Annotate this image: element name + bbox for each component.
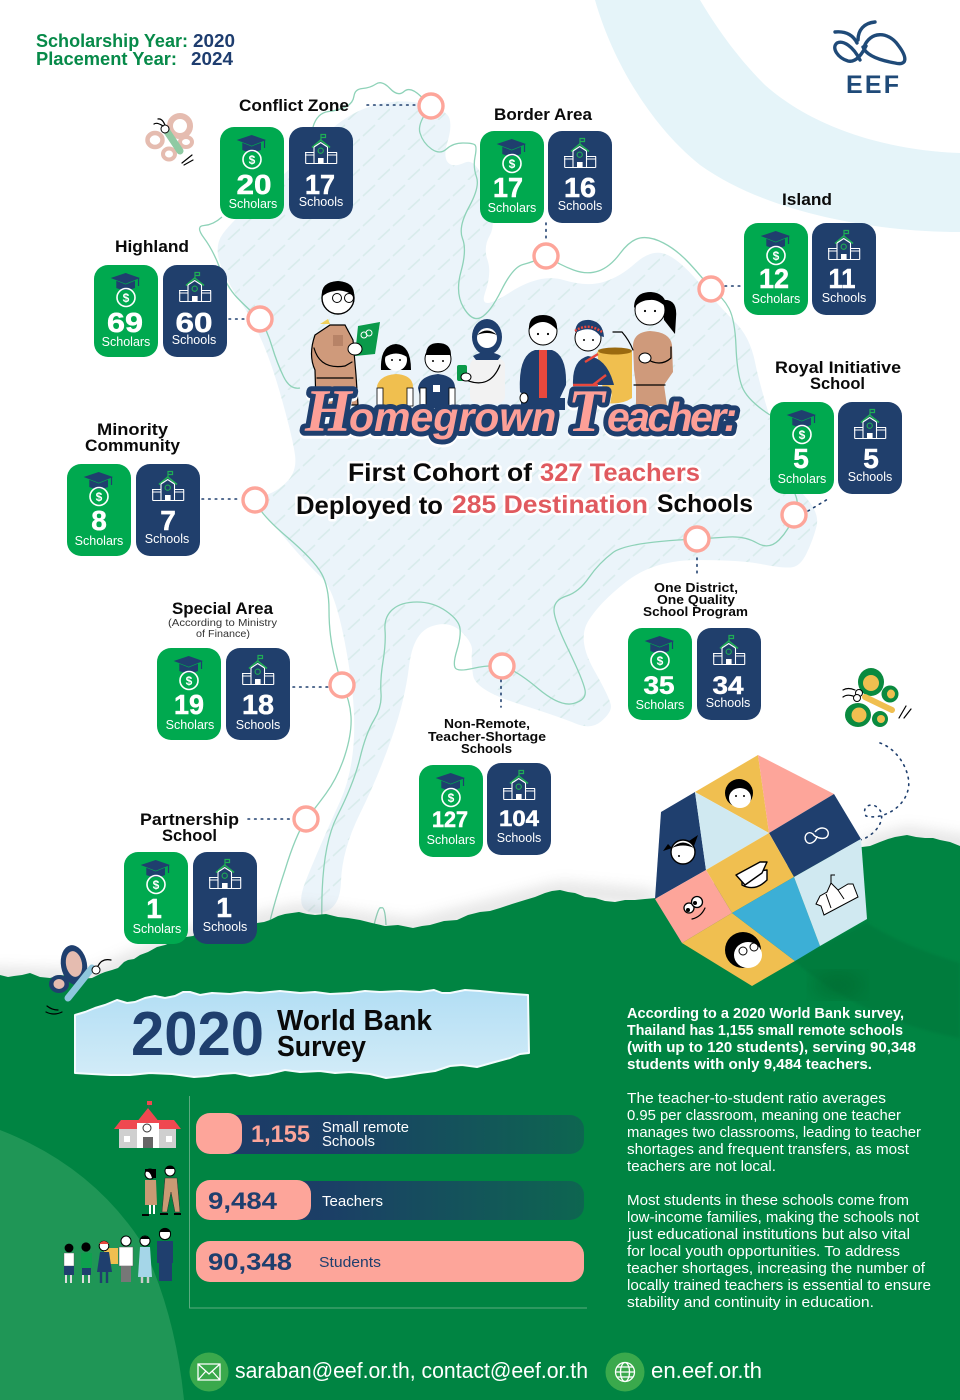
panel: non-remote teacher-shortage [419,716,551,857]
contact: email [190,1352,588,1392]
text block: teacher ratio: shortages and frequent transfers, as most [627,1142,909,1158]
scholars card: 69 [107,307,143,338]
icon: googly eyes [684,896,705,919]
schools card: 34 [712,672,744,700]
scholarship and placement years [36,31,235,69]
hexagon origami puzzle [655,755,867,986]
scholars card: Scholars [752,292,800,306]
decorative sky arc [595,0,960,232]
stat bar: teachers: Teachers [322,1193,383,1210]
schools card [697,628,761,720]
schools card [838,402,902,494]
banner heading: World Bank [277,1005,433,1037]
hill-tribe girl with basket figure [573,320,632,403]
schools card [136,464,200,556]
scholars card: Scholars [427,833,475,847]
scholars card [770,402,834,494]
text block: survey summary [627,1006,916,1073]
heading: Conflict Zone [239,96,349,115]
stat bar: students: Students [319,1254,381,1271]
contact: website: en.eef.or.th [651,1358,762,1383]
icon: paper school [816,875,858,915]
heading: School [162,826,217,845]
male teacher figure [312,281,380,405]
heading: of Finance) [196,629,250,640]
panel: border area [480,105,612,223]
contact: website [606,1352,762,1392]
icon: graduation cap [736,862,767,888]
schools card: Schools [497,831,541,845]
scholars card: 19 [174,689,204,720]
scholars card [157,648,221,740]
text block: teacher ratio: The teacher-to-student ratio averages [627,1091,886,1107]
scholars card [628,628,692,720]
scholars card: Scholars [166,718,214,732]
heading: Special Area [172,600,274,618]
title: Homegrown Teacher: eacher: [607,394,736,440]
panel: conflict zone [220,96,353,219]
stat bar: teachers [196,1180,584,1220]
icon: students group [64,1228,173,1283]
schools card [289,127,353,219]
scholars card [124,852,188,944]
schools card [163,265,227,357]
schools card: 17 [305,169,335,200]
text block: survey summary: (with up to 120 students), serving 90,348 [627,1040,916,1056]
scholars card: 17 [493,172,523,203]
heading: Royal Initiative [775,358,901,377]
heading [428,716,546,756]
text block: student background: locally trained teachers is essential to ensure [627,1278,931,1294]
scholars card: Scholars [229,197,277,211]
scholars card: Scholars [75,534,123,548]
man in traditional dress figure [520,315,566,410]
scholars card: Scholars [102,335,150,349]
schools card: Schools [145,532,189,546]
female teacher figure [613,292,676,406]
scholars card [744,223,808,315]
title: Homegrown Teacher: T [568,378,607,444]
icon: woman face [725,779,753,808]
schools card: 18 [242,689,274,720]
banner: 2020 World Bank Survey [75,990,529,1078]
scholars card [419,765,483,857]
text block: survey summary: students with only 9,484 teachers. [627,1057,872,1073]
heading: Border Area [494,105,593,124]
stat bar: small remote schools [196,1113,584,1154]
schools card: 16 [564,172,596,203]
heading [140,810,239,845]
heading [643,580,748,619]
scholarship and placement years: 2020 [193,31,235,51]
girl student figure [377,344,413,406]
EEF logo: EEF [846,71,899,99]
schools card [812,223,876,315]
text block: teacher ratio: 0.95 per classroom, meaning one teacher [627,1108,901,1124]
panel: partnership school [124,810,257,944]
heading: School Program [643,604,748,619]
stat bar: students: 90,348 [208,1249,292,1276]
schools card [548,131,612,223]
title: Homegrown Teacher: omegrown [349,394,568,440]
stat bar: small remote schools: 1,155 [251,1121,310,1148]
heading: One District, [654,580,738,595]
stat bar: small remote schools: Small remote [322,1119,409,1136]
panel: island [744,190,876,315]
heading: Minority [97,420,169,439]
scholars card [67,464,131,556]
schools card: 60 [176,307,212,338]
scholars card: Scholars [636,698,684,712]
schools card: 1 [216,892,232,923]
heading: Community [85,436,181,455]
subtitle: First Cohort of [348,459,533,487]
icon: pink butterfly [148,116,193,165]
scholarship and placement years: Placement Year: [36,49,177,69]
banner heading: Survey [277,1031,366,1063]
heading [775,358,901,393]
heading: Non-Remote, [444,716,530,731]
text block: student background: teacher shortages, increasing the number of [627,1261,926,1277]
text block: survey summary: According to a 2020 World Bank survey, [627,1006,904,1022]
flight trail dots [860,743,909,840]
panel: minority community [67,420,200,556]
stat bar: small remote schools: Schools [322,1133,375,1150]
scholarship and placement years: 2024 [191,49,233,69]
text block: teacher ratio [627,1091,921,1175]
heading [168,600,277,640]
heading [85,420,181,455]
panel: special area [157,600,290,740]
heading: (According to Ministry [168,618,277,629]
scholars card: 12 [759,263,789,294]
scholars card: Scholars [133,922,181,936]
icon: teachers [142,1166,181,1215]
text block: teacher ratio: teachers are not local. [627,1159,776,1175]
text block: student background: Most students in these schools come from [627,1193,909,1209]
illustration: teachers and community characters [312,281,676,410]
text block: student background: low-income families, making the schools not [627,1210,919,1226]
map of Thailand [218,101,817,913]
text block: student background: for local youth opportunities. To address [627,1244,900,1260]
chart axis [190,1096,587,1308]
scholars card [220,127,284,219]
scholars card: 1 [146,893,162,924]
EEF logo [835,22,905,99]
subtitle [296,459,753,520]
heading: Partnership [140,810,239,829]
heading: School [810,374,865,393]
schools card: 5 [863,443,879,474]
scholars card: 20 [236,169,272,200]
map border lines [200,83,797,925]
text block: student background: just educational institutions but also vital [627,1227,910,1243]
icon: girl face [663,835,698,864]
schools card: 7 [160,505,176,536]
subtitle: Schools [657,490,753,518]
lighter corner arc [0,1130,184,1400]
scholars card: 127 [432,807,468,832]
contact: email: saraban@eef.or.th, contact@eef.or.th [235,1358,588,1383]
schools card: Schools [236,718,280,732]
scholars card: 8 [91,505,107,536]
text block: student background [627,1193,931,1311]
text block: survey summary: Thailand has 1,155 small remote schools [627,1023,903,1039]
schools card: Schools [203,920,247,934]
subtitle: 285 Destination [452,491,648,519]
heading: One Quality [657,592,736,607]
schools card: 11 [828,263,856,294]
scholars card: 5 [793,443,809,474]
panel: highland [94,237,227,357]
stat bar: teachers: 9,484 [208,1188,278,1215]
scholars card: 35 [644,672,675,700]
heading: Highland [115,237,189,256]
heading: Island [782,190,832,209]
schools card: Schools [558,199,602,213]
icon: navy butterfly [46,943,111,1014]
icon: EEF mark [805,828,828,843]
map location pins [243,94,806,831]
schools card: 104 [499,806,540,831]
scholars card [480,131,544,223]
panel: one district one quality [628,580,761,720]
icon: school building [114,1101,181,1148]
heading: Schools [461,741,512,756]
schools card [487,763,551,855]
panel: royal initiative school [770,358,902,494]
text block: teacher ratio: manages two classrooms, leading to teacher [627,1125,921,1141]
green hillside shadow [0,835,960,978]
year: 2020 [131,1000,264,1069]
schools card: Schools [299,195,343,209]
torn paper [75,990,529,1078]
icon: green butterfly [843,668,911,727]
text block: student background: stability and continuity in education. [627,1295,874,1311]
schools card [193,852,257,944]
subtitle: 327 Teachers [540,459,700,487]
schools card: Schools [172,333,216,347]
icon: boy with glasses [725,932,762,968]
hijab student figure [457,319,505,404]
green hillside background [0,835,960,1400]
banner heading [277,1005,433,1063]
stat bar: students [196,1241,584,1282]
scholars card: Scholars [778,472,826,486]
boy student figure [418,343,455,408]
connector dotted lines [202,105,828,819]
scholars card [94,265,158,357]
heading: Teacher-Shortage [428,729,546,744]
scholarship and placement years: Scholarship Year: [36,31,188,51]
schools card: Schools [848,470,892,484]
title: Homegrown Teacher: H [304,378,354,444]
scholars card: Scholars [488,201,536,215]
schools card: Schools [706,696,750,710]
schools card [226,648,290,740]
darker hill shading [793,923,960,1038]
subtitle: Deployed to [296,492,443,520]
schools card: Schools [822,291,866,305]
